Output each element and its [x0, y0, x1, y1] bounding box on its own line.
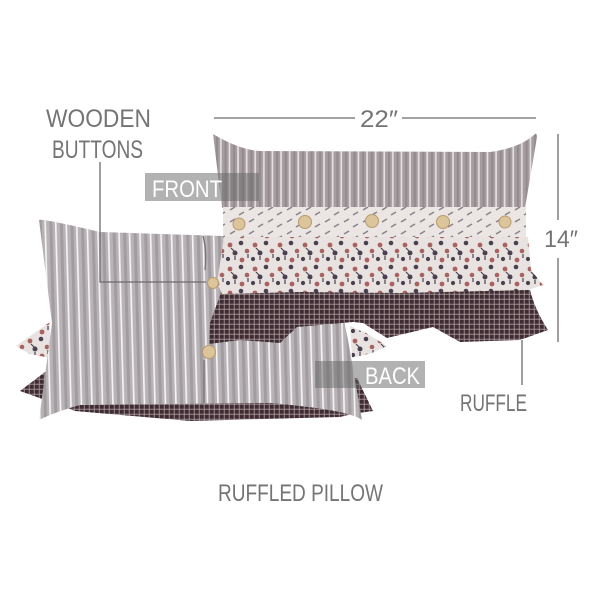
- wooden buttons: [202, 214, 511, 358]
- ruffle label: [460, 340, 527, 417]
- wooden buttons label: WOODEN: [46, 105, 151, 133]
- front cream band: [223, 207, 526, 238]
- back pillow: [16, 220, 387, 421]
- front label: FRONT: [152, 176, 222, 203]
- front striped top: [213, 134, 537, 208]
- width dimension: 22″: [360, 106, 399, 133]
- wooden buttons leader arrow: [100, 162, 206, 282]
- front plaid ruffle: [209, 290, 548, 344]
- back label: BACK: [365, 363, 420, 390]
- back plaid ruffle: [20, 372, 373, 421]
- back label: [315, 361, 425, 390]
- wooden buttons label: BUTTONS: [52, 136, 143, 164]
- back striped body: [39, 220, 362, 420]
- wooden buttons label: [46, 105, 151, 164]
- height dimension: 14″: [544, 226, 578, 253]
- front floral ruffle: [217, 237, 543, 294]
- back floral flaps: [16, 322, 387, 358]
- back placket seam: [203, 236, 206, 403]
- caption: RUFFLED PILLOW: [218, 480, 383, 507]
- ruffle label: RUFFLE: [460, 390, 527, 417]
- front pillow: [209, 134, 548, 344]
- front label: [145, 173, 259, 203]
